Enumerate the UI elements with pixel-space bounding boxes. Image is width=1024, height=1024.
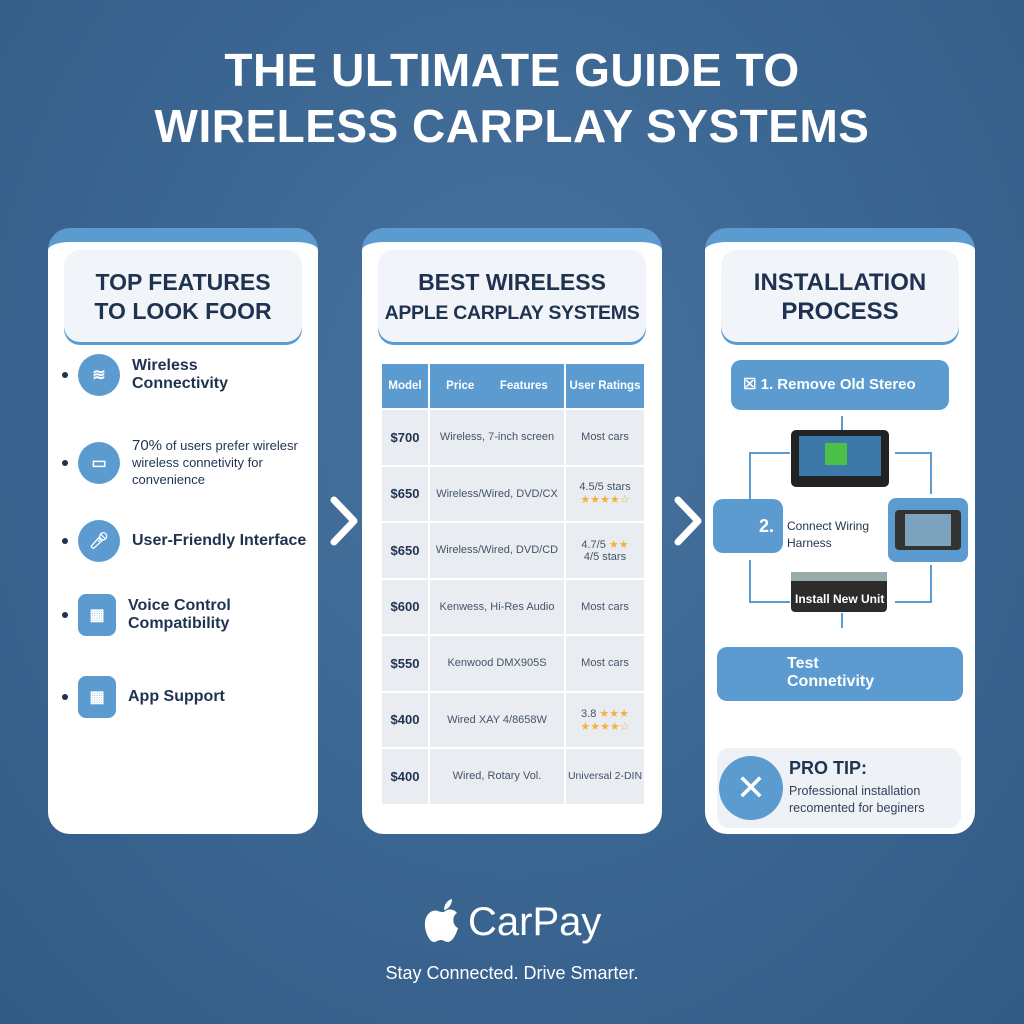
step 2 <box>713 499 783 553</box>
comparison table: User Ratings <box>570 380 640 392</box>
comparison table: 3.8 ★★★ <box>581 708 629 720</box>
feature: 70% stat: 70% of users prefer wirelesr <box>132 437 298 454</box>
step 4 <box>717 647 963 701</box>
comparison table: $650 <box>391 543 419 558</box>
comparison table: Most cars <box>581 657 629 669</box>
panel: installation <box>705 228 975 834</box>
comparison table: $550 <box>391 656 419 671</box>
feature: voice control: Compatibility <box>128 615 229 632</box>
tagline: Stay Connected. Drive Smarter. <box>385 963 639 983</box>
comparison table: $700 <box>391 430 419 445</box>
comparison table: 4/5 stars <box>584 551 626 563</box>
icon: tools <box>719 756 783 820</box>
step 2 label: Harness <box>787 536 832 550</box>
heading: top features: TO LOOK FOOR <box>94 298 272 324</box>
comparison table: Most cars <box>581 431 629 443</box>
pro tip <box>717 748 961 828</box>
feature: wireless connectivity: Connectivity <box>132 375 228 392</box>
panel: top features <box>48 228 318 834</box>
step 2 label: Connect Wiring <box>787 519 869 533</box>
icon: tools: ✕ <box>736 767 766 808</box>
title: WIRELESS CARPLAY SYSTEMS <box>155 100 869 152</box>
feature: 70% stat: convenience <box>132 472 205 487</box>
feature: voice control <box>62 594 231 636</box>
feature: app support: App Support <box>128 688 225 705</box>
comparison table: $400 <box>391 769 419 784</box>
heading: top features: TOP FEATURES <box>95 269 271 295</box>
title <box>154 44 869 152</box>
flow diagram <box>749 416 968 628</box>
feature: wireless connectivity <box>62 354 228 396</box>
feature: 70% stat: wireless connetivity for <box>132 455 263 470</box>
feature: user-friendly interface: 🎤︎ <box>89 533 109 550</box>
icon: apple <box>424 899 458 942</box>
heading: installation: INSTALLATION <box>754 269 926 296</box>
feature: wireless connectivity: ≋ <box>92 367 106 384</box>
step 2: 2. <box>759 516 774 536</box>
comparison table: Wired XAY 4/8658W <box>447 714 547 726</box>
comparison table: Kenwess, Hi-Res Audio <box>440 601 554 613</box>
comparison table: 4.7/5 ★★ <box>581 539 629 551</box>
feature: app support: ▦ <box>89 689 105 706</box>
heading: installation: PROCESS <box>781 298 899 325</box>
comparison table: Kenwood DMX905S <box>447 657 547 669</box>
heading: top features <box>64 250 302 342</box>
comparison table: 4.5/5 stars <box>579 481 631 493</box>
comparison table: ★★★★☆ <box>580 494 630 506</box>
heading: best systems <box>378 250 646 342</box>
step 1: ☒ 1. Remove Old Stereo <box>743 376 916 393</box>
pro tip: PRO TIP: <box>789 758 867 778</box>
pro tip: recomented for beginers <box>789 801 924 815</box>
flow diagram: Install New Unit <box>795 592 884 606</box>
feature: 70% stat: ▭ <box>91 454 107 472</box>
feature: app support <box>62 676 225 718</box>
step 1 <box>731 360 949 410</box>
heading: installation <box>721 250 959 342</box>
step 4: Test <box>787 655 819 672</box>
heading: best systems: BEST WIRELESS <box>418 269 606 295</box>
feature: 70% stat <box>62 437 298 487</box>
feature: voice control: ▦ <box>89 607 105 624</box>
heading: best systems: APPLE CARPLAY SYSTEMS <box>385 302 639 324</box>
comparison table: Most cars <box>581 601 629 613</box>
comparison table: Price Features <box>446 380 548 392</box>
comparison table: ★★★★☆ <box>580 721 630 733</box>
comparison table <box>382 364 644 804</box>
feature: voice control: Voice Control <box>128 597 231 614</box>
feature: user-friendly interface: User-Friendly Interface <box>132 532 306 549</box>
pro tip: Professional installation <box>789 784 920 798</box>
comparison table: Wired, Rotary Vol. <box>453 770 541 782</box>
comparison table: Universal 2-DIN <box>568 770 642 782</box>
comparison table: $400 <box>391 712 419 727</box>
comparison table: Wireless/Wired, DVD/CD <box>436 544 558 556</box>
comparison table: $600 <box>391 599 419 614</box>
title: THE ULTIMATE GUIDE TO <box>224 44 800 96</box>
feature: wireless connectivity: Wireless <box>132 357 198 374</box>
footer logo: CarPay <box>468 900 601 944</box>
step 4: Connetivity <box>787 673 874 690</box>
step 2 label <box>787 519 869 550</box>
comparison table: $650 <box>391 486 419 501</box>
comparison table: Wireless, 7-inch screen <box>440 431 554 443</box>
feature: user-friendly interface <box>62 520 306 562</box>
comparison table: Wireless/Wired, DVD/CX <box>436 488 558 500</box>
panel: best systems <box>362 228 662 834</box>
arrow 1 <box>330 496 358 546</box>
arrow 2 <box>674 496 702 546</box>
comparison table: Model <box>388 380 422 392</box>
